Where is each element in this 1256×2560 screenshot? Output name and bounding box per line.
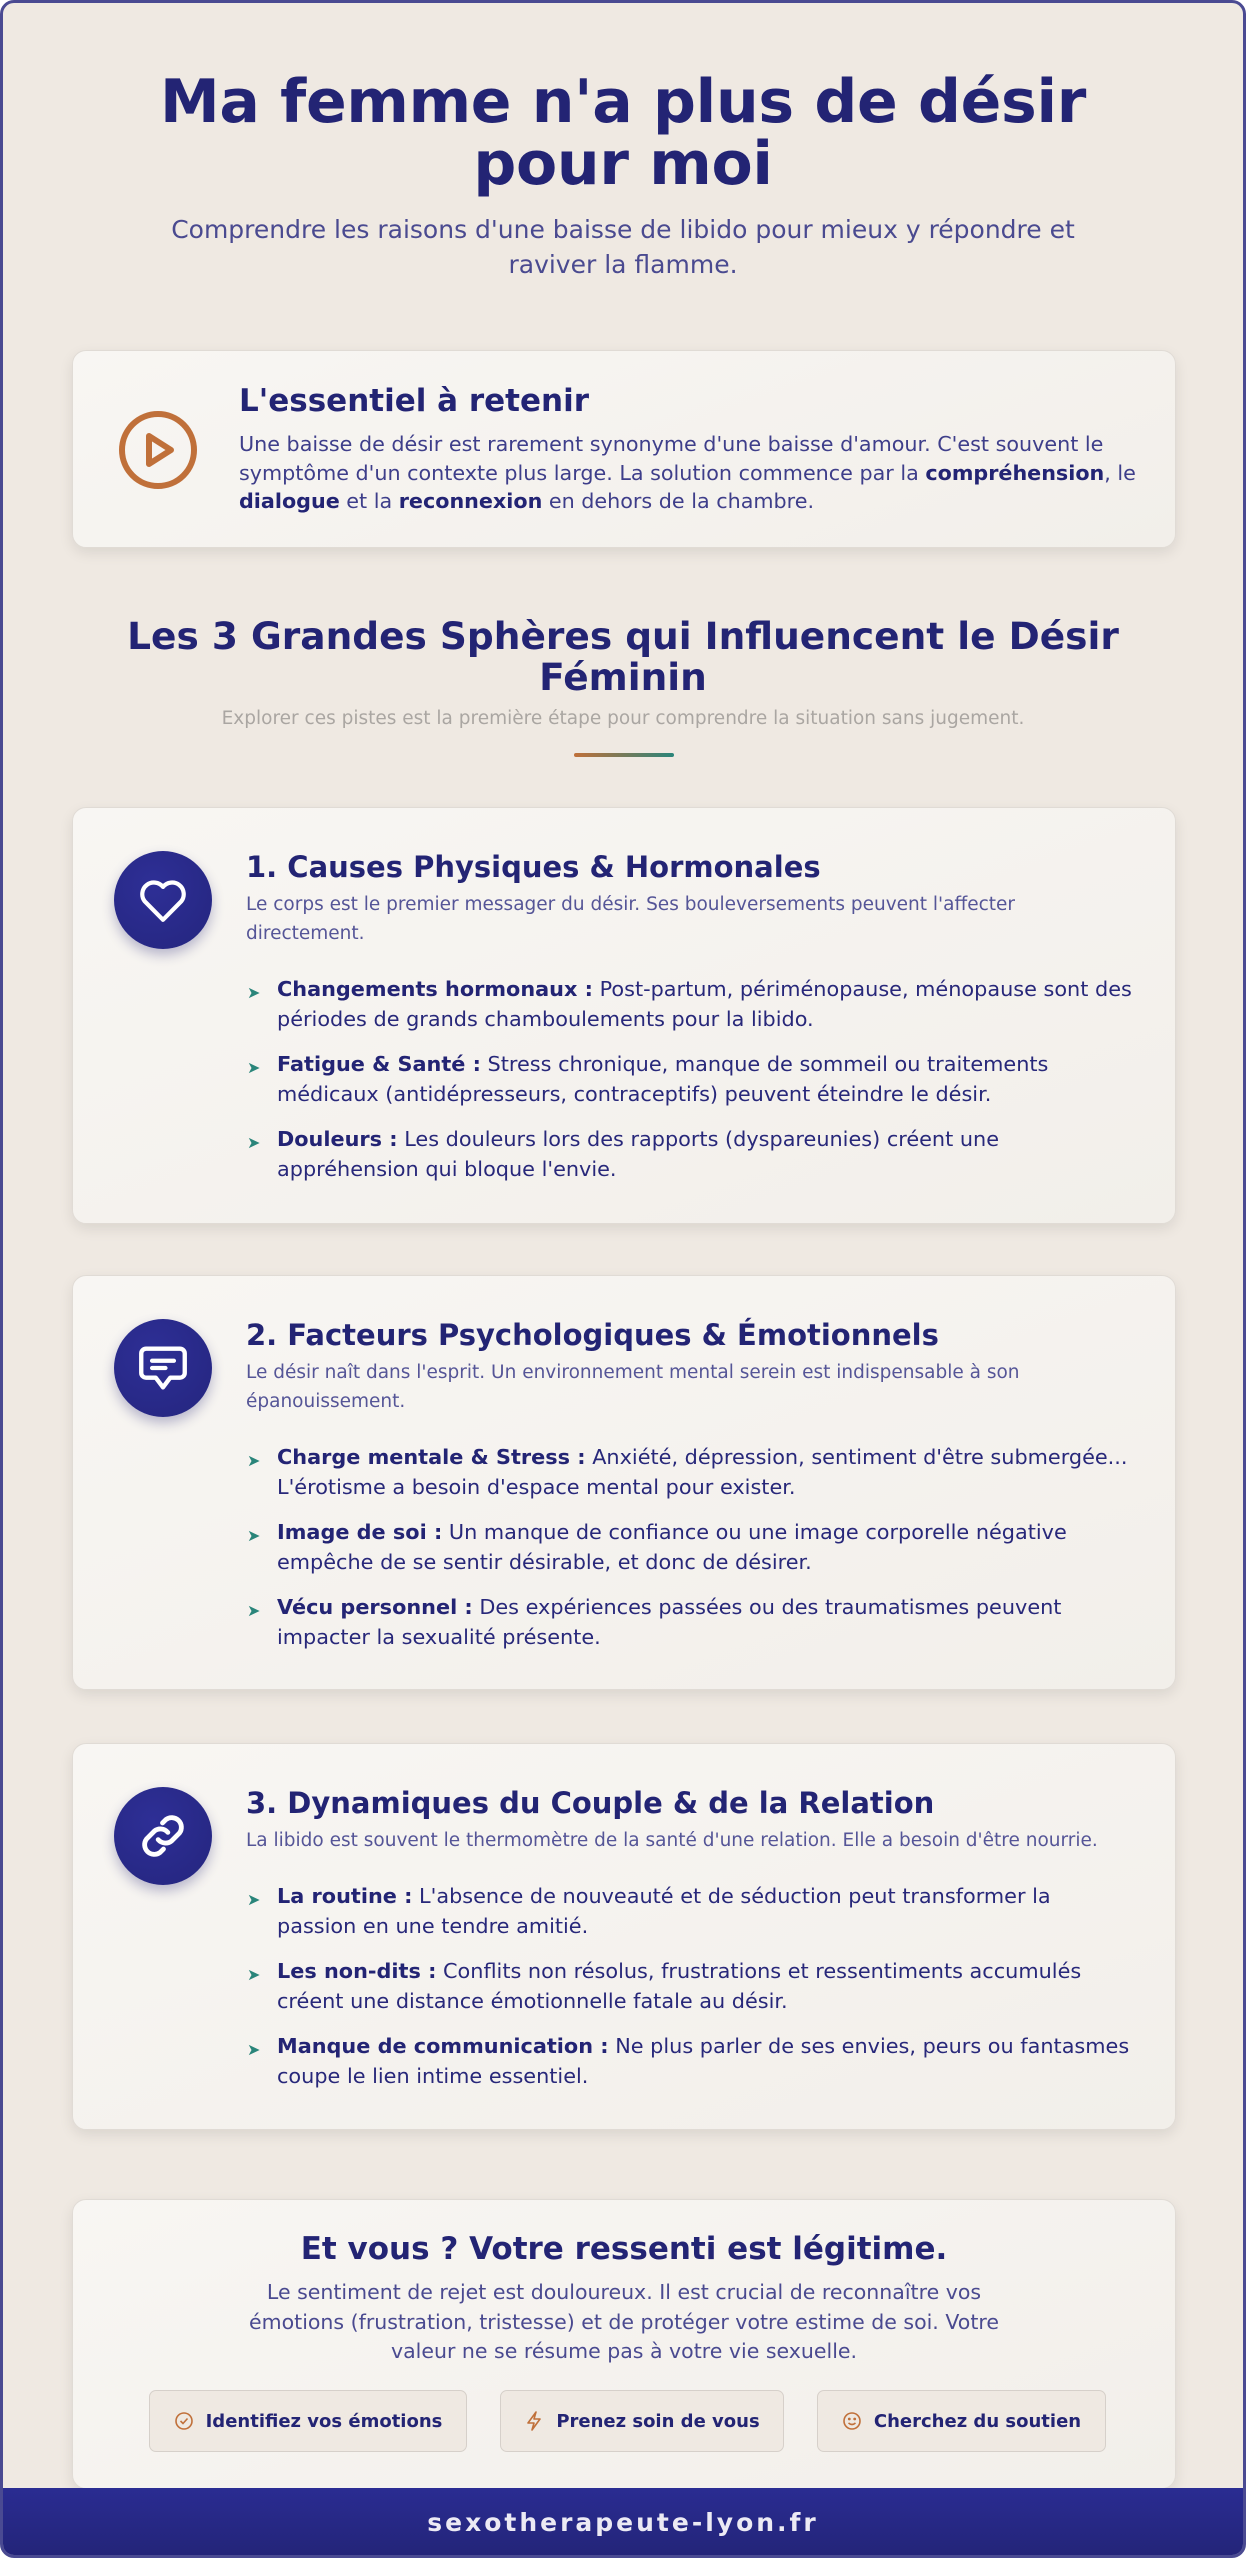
footer (3, 2488, 1243, 2558)
list: couple (248, 1884, 1129, 2088)
list: couple: La routine : L'absence de nouveauté et de séduction peut transformer la (277, 1884, 1051, 1908)
list: causes: Douleurs : Les douleurs lors des rapports (dyspareunies) créent une appréhension qui bloque l'envie. (277, 1127, 999, 1180)
list: psycho (248, 1445, 1128, 1648)
icon: link (114, 1787, 212, 1885)
list: couple: Manque de communication : Ne plus parler de ses envies, peurs ou fantasmes coupe le lien intime essentiel. (277, 2034, 1129, 2088)
heading: et vous: Et vous ? Votre ressenti est légitime. (301, 2231, 947, 2267)
title: pour moi (473, 129, 773, 199)
heading: causes: 1. Causes Physiques & Hormonales (246, 850, 821, 884)
list: psycho: Vécu personnel : Des expériences passées ou des traumatismes peuvent impacter la sexualité présente. (277, 1595, 1061, 1648)
list: psycho: Image de soi : Un manque de confiance ou une image corporelle négative empêche de se sentir désirable, et donc de désirer. (277, 1520, 1067, 1574)
text: causes desc: Le corps est le premier messager du désir. Ses bouleversements peuvent l'affecter directement. (246, 894, 1015, 944)
subtitle: Comprendre les raisons d'une baisse de libido pour mieux y répondre et raviver la flamme. (171, 215, 1075, 279)
gradient divider (574, 753, 674, 757)
icon: heart (114, 851, 212, 949)
title: Ma femme n'a plus de désir (160, 67, 1086, 137)
text: et vous: Le sentiment de rejet est douloureux. Il est crucial de reconnaître vos émotions (frustration, tristesse) et de protéger votre estime de soi. Votre valeur ne se résume pas à votre vie sexuelle. (249, 2280, 999, 2363)
icon: chat bubble (114, 1319, 212, 1417)
panel: causes physiques (72, 807, 1176, 1224)
section subtitle: Explorer ces pistes est la première étape pour comprendre la situation sans jugement. (222, 708, 1024, 729)
button: soin (500, 2390, 784, 2452)
heading: couple: 3. Dynamiques du Couple & de la Relation (246, 1786, 934, 1820)
panel: essentiel (72, 350, 1176, 548)
button: soutien: Cherchez du soutien (874, 2410, 1081, 2432)
title (160, 67, 1086, 199)
button: emotions (149, 2390, 467, 2452)
panel: psychologiques (72, 1275, 1176, 1690)
heading: psychologiques: 2. Facteurs Psychologiques & Émotionnels (246, 1318, 939, 1352)
list: couple: passion en une tendre amitié. (277, 1914, 588, 1938)
text: essentiel: Une baisse de désir est rarement synonyme d'une baisse d'amour. C'est souvent le symptôme d'un contexte plus large. La solution commence par la compréhension, le dialogue et la reconnexion en dehors de la chambre. (239, 432, 1136, 513)
text: psycho desc: Le désir naît dans l'esprit. Un environnement mental serein est indispensable à son épanouissement. (246, 1362, 1020, 1412)
section heading: Les 3 Grandes Sphères qui Influencent le Désir Féminin (127, 614, 1119, 699)
list: causes: Changements hormonaux : Post-partum, périménopause, ménopause sont des périodes de grands chamboulements pour la libido. (277, 977, 1132, 1030)
button: soin: Prenez soin de vous (556, 2410, 760, 2432)
button: soutien (817, 2390, 1106, 2452)
panel: et vous (72, 2199, 1176, 2489)
list: psycho: Charge mentale & Stress : Anxiété, dépression, sentiment d'être submergée... L'érotisme a besoin d'espace mental pour exister. (277, 1445, 1128, 1498)
text: couple desc: La libido est souvent le thermomètre de la santé d'une relation. Elle a besoin d'être nourrie. (246, 1830, 1098, 1851)
footer: sexotherapeute-lyon.fr (427, 2508, 819, 2537)
panel: couple (72, 1743, 1176, 2130)
list: couple: Les non-dits : Conflits non résolus, frustrations et ressentiments accumulés créent une distance émotionnelle fatale au désir. (277, 1959, 1081, 2012)
button: emotions: Identifiez vos émotions (206, 2410, 442, 2432)
icon: play circle (119, 411, 197, 489)
heading: essentiel: L'essentiel à retenir (239, 383, 589, 419)
list: causes: Fatigue & Santé : Stress chronique, manque de sommeil ou traitements médicaux (antidépresseurs, contraceptifs) peuvent éteindre le désir. (277, 1052, 1048, 1106)
list: causes (248, 977, 1132, 1180)
